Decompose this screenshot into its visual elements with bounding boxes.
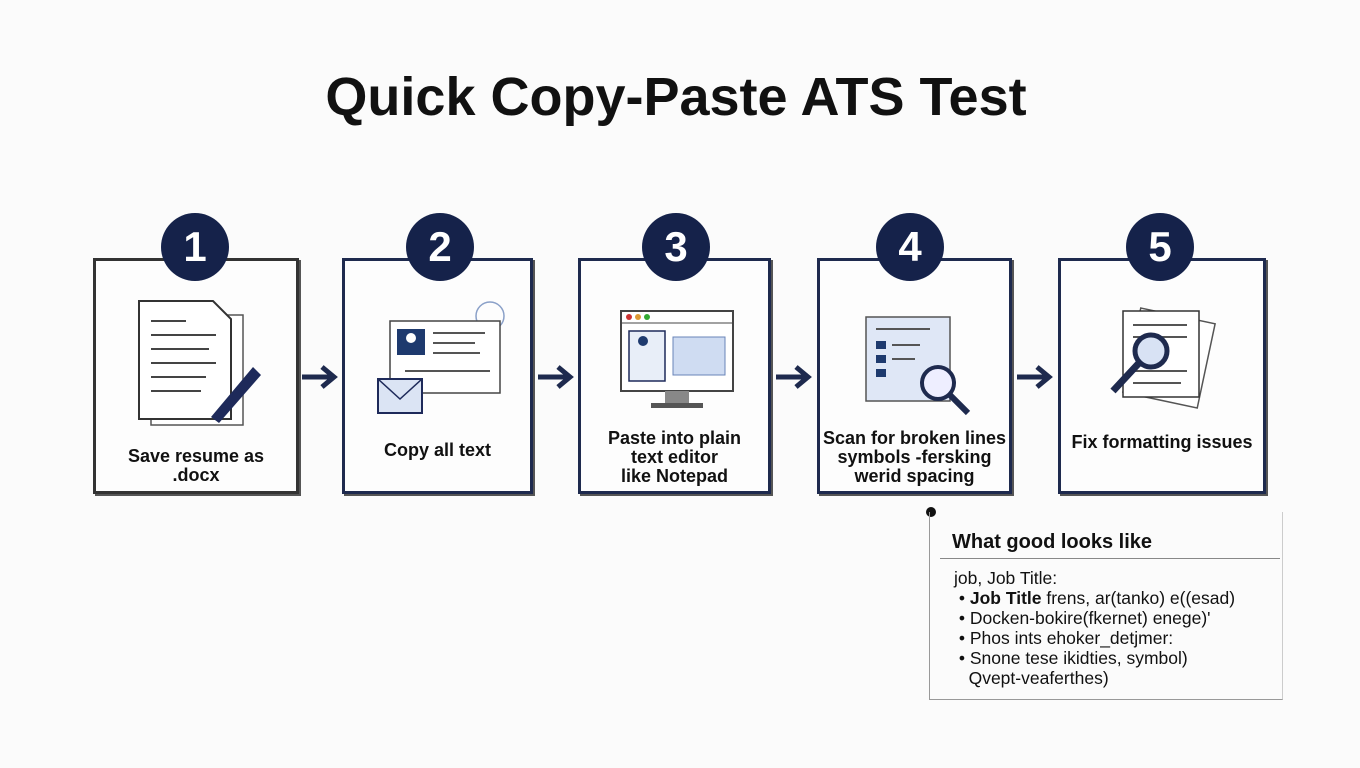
connector dot (926, 507, 936, 517)
label: werid spacing (854, 466, 975, 486)
arrow 3 (776, 365, 812, 389)
badge 3: 3 (664, 223, 688, 270)
panel: step 1 (93, 258, 299, 494)
callout: what good looks like (929, 512, 1283, 700)
callout list: • Docken-bokire(fkernet) enege)' (959, 608, 1211, 628)
arrow 2 (538, 365, 574, 389)
panel: step 4 (817, 258, 1012, 494)
label: Scan for broken lines (823, 428, 1006, 448)
callout list: • Phos ints ehoker_detjmer: (959, 628, 1173, 648)
panel: step 2 (342, 258, 533, 494)
badge 2 (406, 213, 474, 281)
panel: step 3 (578, 258, 771, 494)
badge 1 (161, 213, 229, 281)
label: Fix formatting issues (1071, 432, 1253, 452)
icon: profile card and envelope (377, 301, 505, 414)
badge 3 (642, 213, 710, 281)
badge 1: 1 (183, 223, 207, 270)
panel: step 5 (1058, 258, 1266, 494)
badge 5 (1126, 213, 1194, 281)
label (608, 428, 741, 486)
badge 4: 4 (898, 223, 922, 270)
callout list: • Job Title frens, ar(tanko) e((esad) (959, 588, 1235, 608)
callout list: Qvept-veaferthes) (969, 668, 1109, 688)
callout list: job, Job Title: (954, 568, 1057, 588)
badge 4 (876, 213, 944, 281)
label: symbols ‑fersking (837, 447, 992, 467)
icon: papers with magnifier (1110, 307, 1216, 409)
badge 5: 5 (1148, 223, 1172, 270)
icon: monitor (620, 310, 734, 408)
badge 2: 2 (428, 223, 452, 270)
label: text editor (631, 447, 718, 467)
label: Paste into plain (608, 428, 741, 448)
label (823, 428, 1006, 486)
title: Quick Copy-Paste ATS Test (325, 67, 1027, 127)
icon: documents with pencil (138, 300, 261, 426)
label: Copy all text (384, 440, 491, 460)
label (128, 446, 264, 485)
icon: document with magnifier (865, 316, 970, 416)
label: Save resume as (128, 446, 264, 466)
callout list (954, 568, 1235, 688)
arrow 4 (1017, 365, 1053, 389)
arrow 1 (302, 365, 338, 389)
callout heading: What good looks like (952, 531, 1152, 553)
callout list: • Snone tese ikidties, symbol) (959, 648, 1188, 668)
label: like Notepad (621, 466, 728, 486)
label: .docx (172, 465, 220, 485)
